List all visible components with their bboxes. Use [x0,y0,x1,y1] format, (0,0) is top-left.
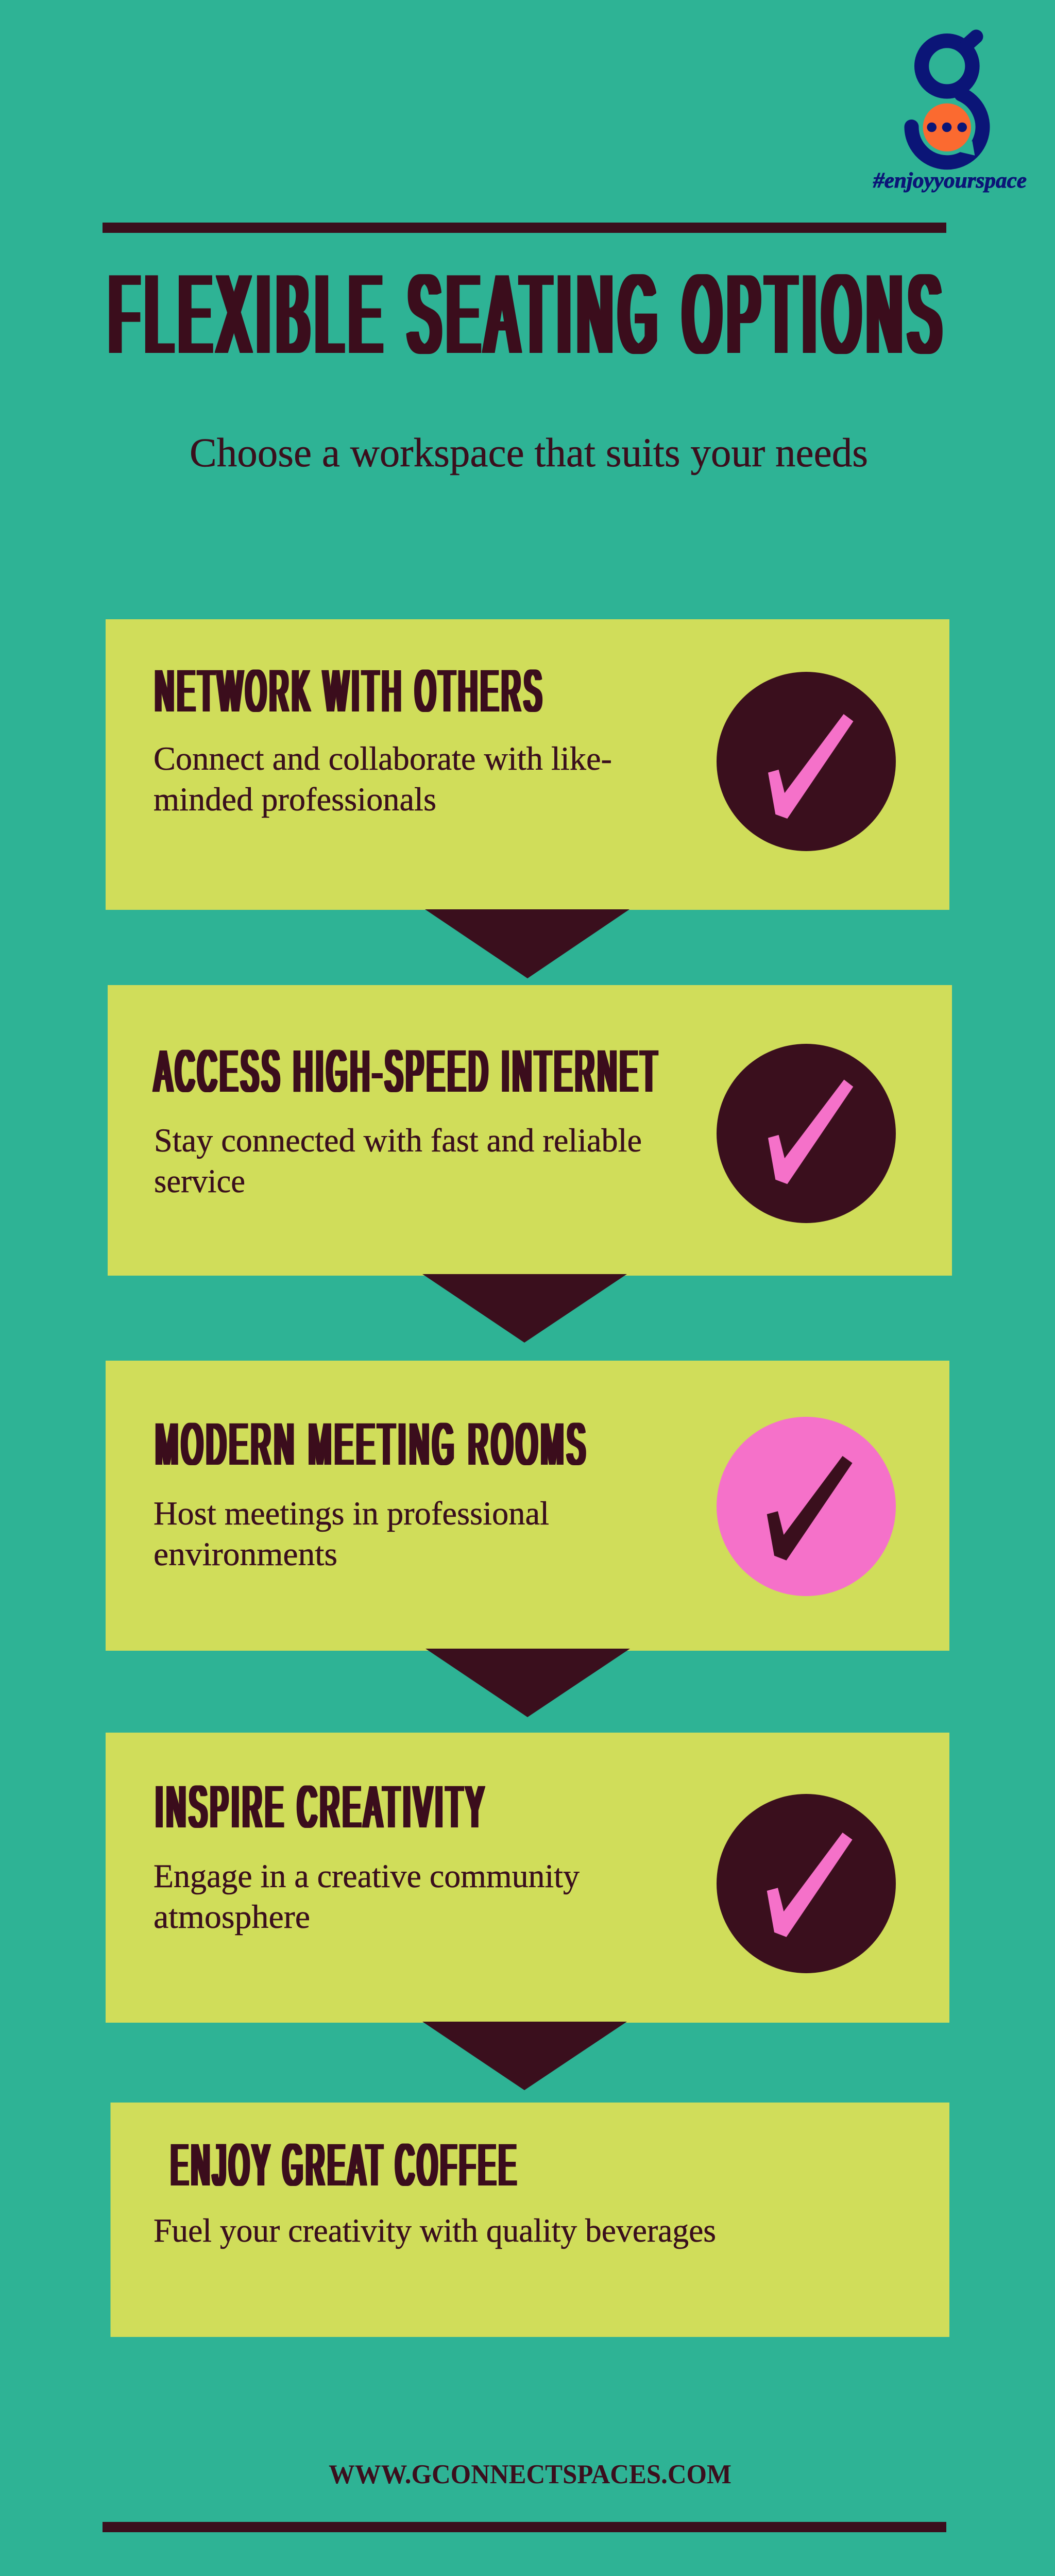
arrow: step 3 to 4 [426,1649,630,1717]
arrow: step 1 to 2 [425,909,629,978]
text: internet description [154,1122,642,1200]
logo tagline: #enjoyyourspace [873,169,1027,193]
text: meeting description [154,1495,549,1573]
icon: check in dark circle [717,672,896,851]
arrow: step 2 to 3 [422,1274,627,1343]
panel: enjoy great coffee [110,2103,949,2337]
text: creativity description: Engage in a creative community [154,1858,580,1895]
panel: high-speed internet [108,985,952,1276]
text: meeting description: Host meetings in professional [154,1495,549,1532]
subtitle: Choose a workspace that suits your needs [190,431,868,476]
panel: inspire creativity [106,1733,949,2023]
text: meeting description: environments [154,1536,337,1573]
text: network description: Connect and collaborate with like- [154,740,612,777]
panel: inspire creativity: INSPIRE CREATIVITY [156,1774,487,1840]
text: creativity description [154,1858,580,1936]
text: network description: minded professionals [154,781,436,818]
website url: WWW.GCONNECTSPACES.COM [329,2460,731,2489]
icon: check in pink circle [717,1417,896,1596]
icon: check in dark circle [717,1794,896,1973]
panel: network with others [106,619,949,910]
icon: letter g with chat bubble [911,37,982,162]
text: internet description: Stay connected with fast and reliable [154,1122,642,1159]
bottom rule [103,2522,946,2532]
text: creativity description: atmosphere [154,1899,310,1936]
text: coffee description: Fuel your creativity with quality beverages [154,2212,716,2249]
panel: network with others: NETWORK WITH OTHERS [155,658,545,724]
arrow: step 4 to 5 [422,2022,627,2090]
top rule [103,223,946,233]
panel: modern meeting rooms [106,1361,949,1651]
panel: enjoy great coffee: ENJOY GREAT COFFEE [171,2132,519,2198]
text: network description [154,740,612,818]
text: internet description: service [154,1163,245,1200]
logo: g connect spaces [873,37,1027,193]
icon: check in dark circle [717,1044,896,1223]
